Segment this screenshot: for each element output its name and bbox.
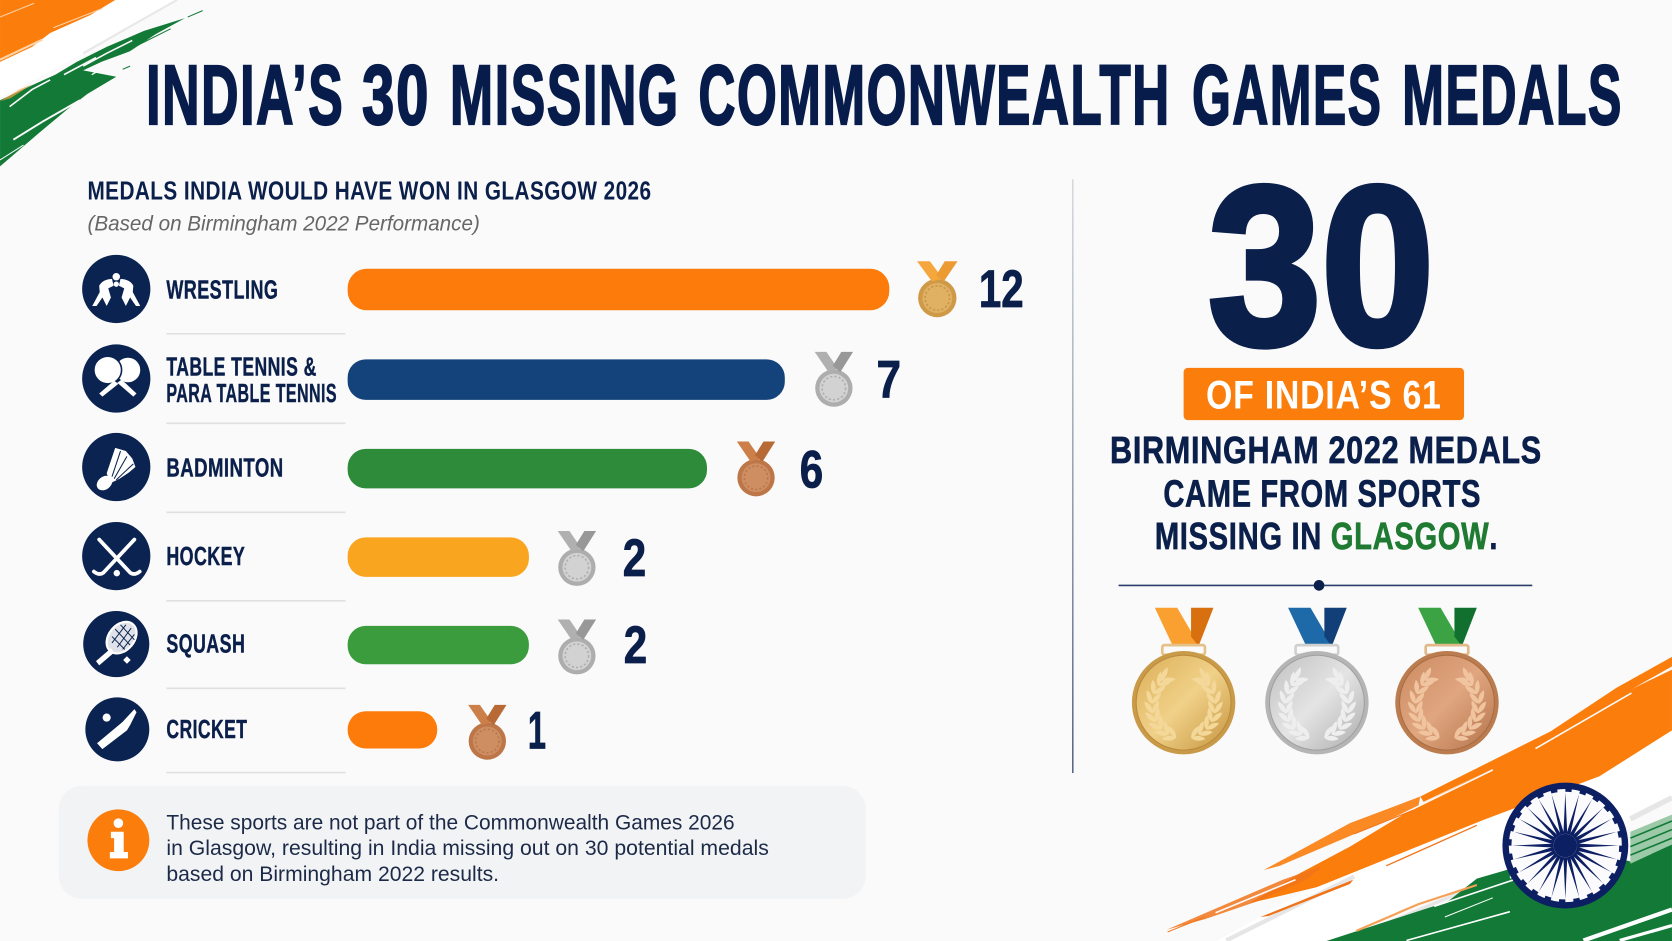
label: CRICKET bbox=[166, 716, 247, 744]
title: 30 bbox=[362, 48, 430, 142]
row: cricket bbox=[85, 697, 546, 761]
row: hockey bbox=[82, 522, 646, 590]
bar: 6 medals bbox=[348, 449, 707, 488]
info box bbox=[59, 786, 866, 899]
icon: silver medal large bbox=[1265, 608, 1369, 754]
value: 2 bbox=[624, 616, 647, 675]
brush: top-left tricolour bbox=[0, 0, 203, 166]
icon: bronze medal large bbox=[1395, 608, 1499, 754]
bar: 12 medals bbox=[348, 269, 889, 310]
info text bbox=[166, 811, 769, 886]
label: HOCKEY bbox=[166, 543, 245, 571]
icon: silver medal bbox=[815, 352, 853, 407]
info text: based on Birmingham 2022 results. bbox=[166, 862, 499, 886]
icon: bronze medal bbox=[737, 441, 775, 496]
panel: key stat bbox=[1110, 139, 1542, 558]
title: COMMONWEALTH bbox=[698, 48, 1171, 142]
row: badminton bbox=[82, 433, 823, 501]
icon: gold medal bbox=[917, 261, 958, 317]
value: 7 bbox=[877, 351, 901, 410]
bar: 1 medal bbox=[348, 711, 437, 749]
icon: wrestlers bbox=[82, 255, 150, 323]
icon: cricket bat bbox=[85, 697, 149, 761]
statement bbox=[1110, 429, 1542, 558]
value: 6 bbox=[800, 440, 823, 499]
icon: silver medal bbox=[558, 620, 596, 674]
bar: 2 medals bbox=[348, 537, 529, 577]
label: WRESTLING bbox=[166, 277, 278, 305]
title bbox=[146, 48, 1623, 142]
statement: CAME FROM SPORTS bbox=[1163, 472, 1481, 515]
icon: gold medal large bbox=[1132, 608, 1235, 754]
chart heading: MEDALS INDIA WOULD HAVE WON IN GLASGOW 2026 bbox=[87, 177, 652, 205]
value: 1 bbox=[528, 702, 546, 761]
value: 12 bbox=[979, 260, 1024, 319]
icon: paddles bbox=[82, 344, 150, 413]
info text: These sports are not part of the Commonwealth Games 2026 bbox=[166, 811, 735, 835]
label: SQUASH bbox=[166, 631, 245, 659]
icon: hockey sticks bbox=[82, 522, 150, 590]
statement: BIRMINGHAM 2022 MEDALS bbox=[1110, 429, 1542, 472]
big number: 30 bbox=[1208, 139, 1434, 392]
title: MISSING bbox=[450, 48, 680, 142]
bar: 2 medals bbox=[348, 626, 529, 664]
row: wrestling bbox=[82, 255, 1024, 323]
title: INDIA’S bbox=[146, 48, 344, 142]
label line 2: PARA TABLE TENNIS bbox=[166, 380, 337, 408]
bar: 7 medals bbox=[348, 359, 785, 400]
orange badge: OF INDIA’S 61 bbox=[1206, 373, 1442, 417]
value: 2 bbox=[623, 529, 646, 588]
icon: shuttlecock bbox=[82, 433, 150, 501]
row: squash bbox=[83, 611, 647, 677]
icon: squash racket bbox=[83, 611, 149, 677]
chart subheading: (Based on Birmingham 2022 Performance) bbox=[87, 212, 480, 235]
brush: bottom-right tricolour bbox=[1167, 657, 1672, 941]
icon: ashoka chakra bbox=[1502, 783, 1628, 908]
info text: in Glasgow, resulting in India missing out on 30 potential medals bbox=[166, 836, 769, 860]
label: BADMINTON bbox=[166, 455, 284, 483]
label: TABLE TENNIS & bbox=[166, 353, 317, 381]
statement: MISSING IN GLASGOW. bbox=[1155, 515, 1498, 558]
row: table tennis bbox=[82, 344, 901, 413]
title: GAMES bbox=[1192, 48, 1382, 142]
icon: bronze medal bbox=[468, 705, 507, 760]
icon: info bbox=[87, 809, 149, 871]
icon: silver medal bbox=[558, 531, 596, 586]
